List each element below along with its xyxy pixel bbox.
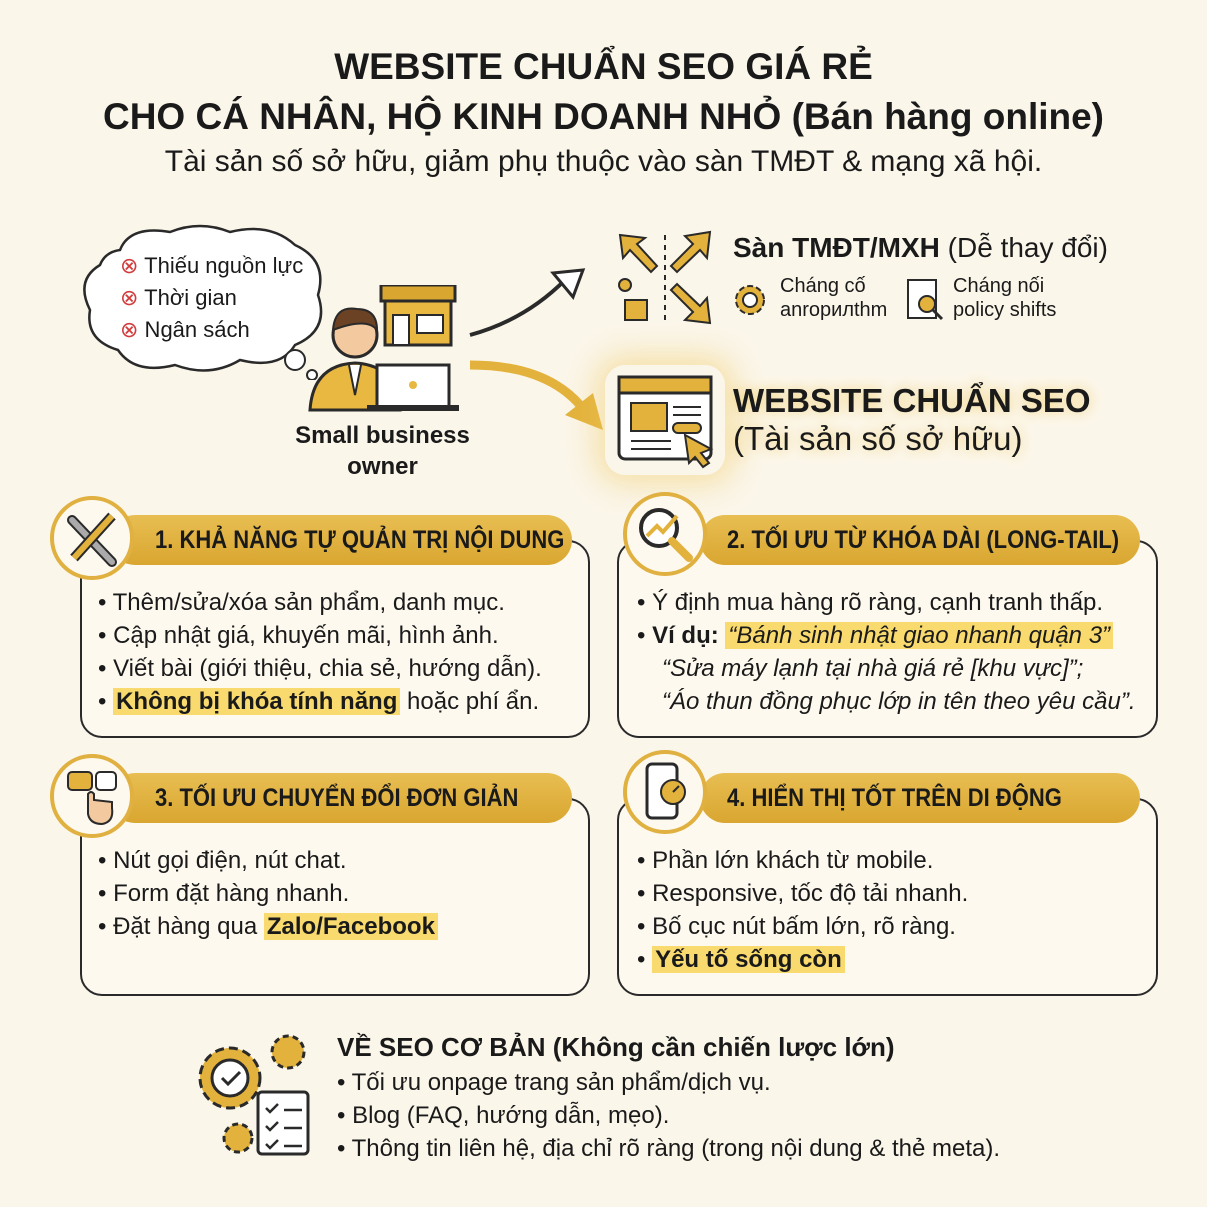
panel 4: Yếu tố sống còn xyxy=(655,946,842,973)
panel 3: Đặt hàng qua Zalo/Facebook xyxy=(113,913,435,940)
heading: san TMDT: Sàn TMĐT/MXH (Dễ thay đổi) xyxy=(733,232,1108,263)
icon: website xyxy=(605,365,725,475)
icon: mobile xyxy=(623,750,707,834)
sub item: policy xyxy=(907,275,1056,321)
panel 3: Form đặt hàng nhanh. xyxy=(113,880,349,907)
panel 3 xyxy=(50,754,590,996)
sub item: algorithm: Cháng cố xyxy=(780,275,866,297)
heading: website chuan seo: (Tài sản số sở hữu) xyxy=(733,420,1022,457)
panel 3: 3. TỐI ƯU CHUYỂN ĐỔI ĐƠN GIẢN xyxy=(155,784,518,812)
subtitle: Tài sản số sở hữu, giảm phụ thuộc vào sàn TMĐT & mạng xã hội. xyxy=(165,145,1042,178)
icon: business owner xyxy=(308,285,459,412)
panel 4: Bố cục nút bấm lớn, rõ ràng. xyxy=(652,913,956,940)
panel 2: Ví dụ: “Bánh sinh nhật giao nhanh quận 3” xyxy=(652,622,1110,649)
title: WEBSITE CHUẨN SEO GIÁ RẺ xyxy=(334,46,873,87)
panel 2: “Áo thun đồng phục lớp in tên theo yêu cầu”. xyxy=(662,688,1136,715)
sub item: algorithm xyxy=(735,275,887,321)
sub item: policy: Cháng nối xyxy=(953,275,1044,297)
panel 2 xyxy=(617,492,1158,738)
panel 4: Phần lớn khách từ mobile. xyxy=(652,847,933,874)
panel 1: Không bị khóa tính năng hoặc phí ẩn. xyxy=(116,688,539,715)
sub item: policy: policy shifts xyxy=(953,299,1056,321)
thought bubble xyxy=(83,224,322,380)
icon: search chart xyxy=(623,492,707,576)
thought bubble: ⊗ Ngân sách xyxy=(120,317,250,342)
icon: marketplace arrows xyxy=(618,230,712,324)
panel 4 xyxy=(617,750,1158,996)
panel 2: “Sửa máy lạnh tại nhà giá rẻ [khu vực]”; xyxy=(662,655,1083,682)
thought bubble: ⊗ Thiếu nguồn lực xyxy=(120,253,303,278)
section: SEO basics: Blog (FAQ, hướng dẫn, mẹo). xyxy=(352,1102,669,1129)
label: small business owner: Small business owner xyxy=(295,422,470,480)
panel 1 xyxy=(50,496,590,738)
section: SEO basics xyxy=(337,1032,1000,1162)
sub item: algorithm: anropилthm xyxy=(780,299,887,321)
icon: gears checklist xyxy=(198,1034,310,1156)
heading: website chuan seo: WEBSITE CHUẨN SEO xyxy=(733,382,1091,419)
heading: website chuan seo xyxy=(729,378,1096,460)
thought bubble: ⊗ Thời gian xyxy=(120,285,237,310)
panel 4: 4. HIỂN THỊ TỐT TRÊN DI ĐỘNG xyxy=(727,784,1062,812)
panel 1: Cập nhật giá, khuyến mãi, hình ảnh. xyxy=(113,622,499,649)
section: SEO basics: Thông tin liên hệ, địa chỉ rõ ràng (trong nội dung & thẻ meta). xyxy=(352,1135,1000,1162)
icon: hand click xyxy=(50,754,134,838)
panel 1: 1. KHẢ NĂNG TỰ QUẢN TRỊ NỘI DUNG xyxy=(155,526,564,554)
panel 1: Thêm/sửa/xóa sản phẩm, danh mục. xyxy=(113,589,505,616)
panel 2: Ý định mua hàng rõ ràng, cạnh tranh thấp. xyxy=(652,589,1103,616)
section: SEO basics: VỀ SEO CƠ BẢN (Không cần chiến lược lớn) xyxy=(337,1032,895,1062)
title: CHO CÁ NHÂN, HỘ KINH DOANH NHỎ (Bán hàng online) xyxy=(103,96,1104,137)
arrows xyxy=(470,268,603,430)
panel 4: Responsive, tốc độ tải nhanh. xyxy=(652,880,968,907)
icon: tools xyxy=(50,496,134,580)
title xyxy=(103,46,1104,137)
panel 1: Viết bài (giới thiệu, chia sẻ, hướng dẫn). xyxy=(113,655,542,682)
panel 3: Nút gọi điện, nút chat. xyxy=(113,847,347,874)
panel 2: 2. TỐI ƯU TỪ KHÓA DÀI (LONG-TAIL) xyxy=(727,526,1119,554)
section: SEO basics: Tối ưu onpage trang sản phẩm/dịch vụ. xyxy=(352,1069,771,1096)
